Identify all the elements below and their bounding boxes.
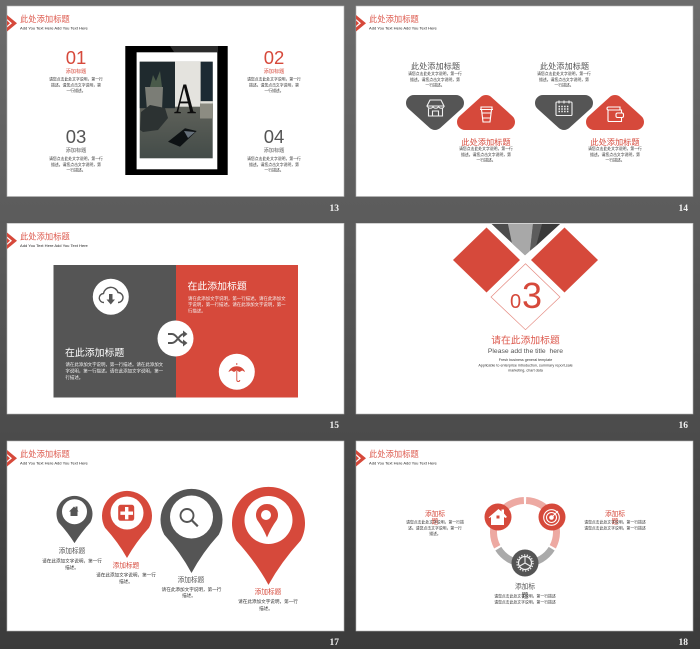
pin 3 — [160, 489, 222, 573]
outlined diamond — [491, 264, 560, 330]
page number: 16 — [678, 421, 688, 431]
red panel body — [188, 295, 286, 314]
header title: 此处添加标题 — [369, 449, 419, 459]
body text gray: 一行描述。 — [425, 82, 445, 88]
red panel body: 请在此添加文字说明，第一行描述。请在此添加文 — [188, 295, 286, 302]
section description: marketing, chart data — [508, 368, 544, 372]
pin 2 label — [96, 560, 156, 585]
body text gray: 一行描述。 — [554, 82, 574, 88]
header icon: chevron — [356, 15, 366, 32]
header title: 此处添加标题 — [20, 14, 70, 24]
slide 18 — [356, 441, 693, 648]
pin 1 label: 描述。 — [65, 564, 79, 571]
body text gray: 描述。请您点击文字说明，第 — [410, 77, 460, 82]
section number — [510, 275, 542, 316]
header icon: chevron — [7, 15, 17, 32]
item 01: 请您点击此处文字说明，第一行 — [49, 76, 103, 82]
header subtitle: Add You Text Here Add You Text Here — [20, 243, 89, 248]
item 02: 02 — [264, 47, 284, 68]
header subtitle: Add You Text Here Add You Text Here — [369, 460, 438, 466]
item 01: 01 — [66, 47, 86, 68]
icon: umbrella — [219, 354, 255, 390]
body text gray — [408, 71, 462, 88]
inverted gray triangle — [414, 103, 456, 122]
pin 3 label: 请在此添加文字说明，第一行 — [162, 586, 222, 593]
right label — [584, 509, 646, 530]
rounded red triangle — [594, 103, 636, 122]
body text red group: 一行描述。 — [605, 158, 625, 162]
icon: house — [484, 504, 512, 530]
bottom label: 请您点击此处文字说明，第一行描述 — [494, 600, 556, 604]
item 03: 一行描述。 — [66, 168, 86, 172]
bottom label — [494, 582, 556, 604]
panel: gray — [54, 265, 176, 398]
pin 4 label — [238, 587, 298, 612]
body text gray: 描述。请您点击文字说明，第 — [539, 77, 589, 82]
section subtitle: Please add the title here — [488, 348, 563, 355]
header subtitle: Add You Text Here Add You Text Here — [20, 460, 89, 466]
item 01 — [49, 47, 103, 93]
icon: gear — [512, 550, 538, 576]
page number: 18 — [678, 638, 688, 648]
pin 1 — [56, 496, 92, 543]
body text red group: 一行描述。 — [476, 158, 496, 162]
group two — [537, 61, 642, 162]
body text gray: 请您点击此处文字说明，第一行 — [408, 71, 462, 76]
item 03: 03 — [66, 126, 86, 147]
page number: 14 — [678, 204, 688, 214]
right label: 请您点击此处文字说明，第一行描述 — [584, 520, 646, 524]
item 01: 描述。请您点击文字说明，第 — [51, 82, 101, 88]
body text red group: 请您点击此处文字说明，第一行 — [459, 146, 513, 151]
item 02 — [247, 47, 301, 93]
item 04: 请您点击此处文字说明，第一行 — [247, 156, 301, 161]
right label: 添加标 — [605, 509, 625, 518]
icon: store — [427, 100, 444, 116]
item 04: 添加标题 — [264, 146, 284, 154]
slide 17 — [7, 441, 344, 648]
icon: shuffle — [158, 320, 194, 356]
right label: 请您点击此处文字说明，第一行描述 — [584, 526, 646, 530]
page number: 13 — [330, 204, 339, 214]
gray panel body: 行描述。 — [66, 374, 83, 381]
left label: 请您点击此处文字说明，第一行描 — [406, 520, 464, 524]
bottom label: 添加标 — [515, 582, 535, 590]
item 03: 请您点击此处文字说明，第一行 — [49, 156, 103, 161]
pin 2 — [102, 491, 152, 558]
left label: 述。请您点击文字说明，第一行 — [408, 526, 462, 530]
left label: 描述。 — [429, 531, 441, 536]
slide 16 — [356, 223, 693, 431]
section title: 请在此添加标题 — [491, 334, 560, 346]
item 02: 请您点击此处文字说明，第一行 — [247, 76, 301, 82]
group one — [408, 61, 513, 162]
header icon: chevron — [356, 450, 366, 466]
gray panel body: 字说明，第一行描述。请在此添加文字说明，第一 — [66, 368, 164, 374]
pin 3 label: 描述。 — [182, 592, 196, 599]
pin 4 — [232, 487, 305, 585]
icon: target — [538, 504, 566, 530]
left label: 题 — [432, 518, 439, 526]
item 04 — [247, 126, 301, 172]
pin 1 label — [42, 546, 102, 571]
slide 14 — [356, 6, 693, 214]
item 02: 描述。请您点击文字说明，第 — [249, 82, 299, 88]
gray panel body — [66, 361, 164, 381]
left label — [406, 509, 464, 536]
left label: 添加标 — [425, 509, 445, 518]
pin 2 label: 描述。 — [119, 578, 133, 585]
red diamond right — [531, 228, 598, 292]
body text red group: 描述。请您点击文字说明，第 — [590, 152, 640, 157]
pin 3 label — [162, 575, 222, 599]
body text gray — [537, 71, 591, 88]
item 04: 一行描述。 — [264, 168, 284, 172]
slide 13 — [7, 6, 344, 214]
icon: calendar — [556, 100, 572, 116]
item 01: 添加标题 — [66, 67, 86, 75]
heading gray: 此处添加标题 — [411, 61, 460, 71]
bottom label: 请您点击此处文字说明，第一行描述 — [494, 594, 556, 598]
inverted gray triangle — [543, 103, 585, 122]
pin 3 label: 添加标题 — [178, 575, 205, 584]
photo triangle — [492, 224, 560, 255]
item 02: 一行描述。 — [264, 88, 284, 93]
item 03: 添加标题 — [66, 146, 86, 154]
section number: 3 — [522, 275, 542, 316]
body text gray: 请您点击此处文字说明，第一行 — [537, 71, 591, 76]
pin 2 label: 请在此添加文字说明，第一行 — [96, 572, 156, 578]
page number: 17 — [330, 638, 339, 648]
heading red: 此处添加标题 — [590, 137, 640, 147]
bottom label: 题 — [522, 592, 529, 600]
slide 15 — [7, 223, 344, 431]
header title: 此处添加标题 — [369, 14, 419, 24]
header title: 此处添加标题 — [20, 232, 70, 242]
section description — [478, 358, 573, 372]
header subtitle: Add You Text Here Add You Text Here — [20, 26, 89, 30]
header subtitle: Add You Text Here Add You Text Here — [369, 26, 438, 30]
photo frame — [125, 46, 228, 175]
body text red group: 描述。请您点击文字说明，第 — [461, 152, 511, 157]
rounded red triangle — [465, 103, 507, 122]
red panel body: 字说明，第一行描述。请在此添加文字说明，第一 — [188, 301, 286, 308]
body text red group: 请您点击此处文字说明，第一行 — [588, 146, 642, 151]
photo frame: A — [174, 76, 196, 123]
icon: cup — [480, 107, 493, 122]
pin 4 label: 请在此添加文字说明，第一行 — [238, 598, 298, 605]
item 03 — [49, 126, 103, 172]
item 01: 一行描述。 — [66, 88, 86, 93]
red panel body: 行描述。 — [188, 308, 206, 314]
right label: 题 — [612, 518, 619, 526]
icon: cloud download — [93, 279, 129, 315]
item 02: 添加标题 — [264, 67, 284, 75]
pin 1 label: 添加标题 — [59, 546, 86, 555]
heading gray: 此处添加标题 — [540, 61, 589, 71]
heading red: 此处添加标题 — [461, 137, 511, 147]
body text red group — [459, 146, 513, 162]
page number: 15 — [330, 421, 339, 431]
item 04: 04 — [264, 126, 284, 147]
pin 1 label: 请在此添加文字说明，第一行 — [42, 558, 102, 564]
header title: 此处添加标题 — [20, 449, 70, 459]
header icon: chevron — [7, 232, 17, 249]
gray panel body: 请在此添加文字说明，第一行描述。请在此添加文 — [66, 361, 164, 368]
header icon: chevron — [7, 450, 17, 466]
ring diagram — [493, 500, 557, 563]
icon: wallet — [607, 107, 624, 122]
section description: Fresh business general template — [499, 358, 552, 362]
panel: red — [176, 265, 298, 398]
pin 4 label: 描述。 — [259, 605, 273, 612]
item 03: 描述。请您点击文字说明，第 — [51, 162, 101, 167]
gray panel title: 在此添加标题 — [65, 346, 124, 359]
red panel title: 在此添加标题 — [188, 280, 247, 292]
section description: Applicable to enterprise introduction, summary report,sale — [478, 364, 573, 368]
section number: 0 — [510, 291, 521, 313]
red diamond left — [453, 228, 520, 292]
pin 4 label: 添加标题 — [255, 587, 282, 596]
body text red group — [588, 146, 642, 162]
pin 2 label: 添加标题 — [113, 560, 140, 570]
item 04: 描述。请您点击文字说明，第 — [249, 162, 299, 167]
